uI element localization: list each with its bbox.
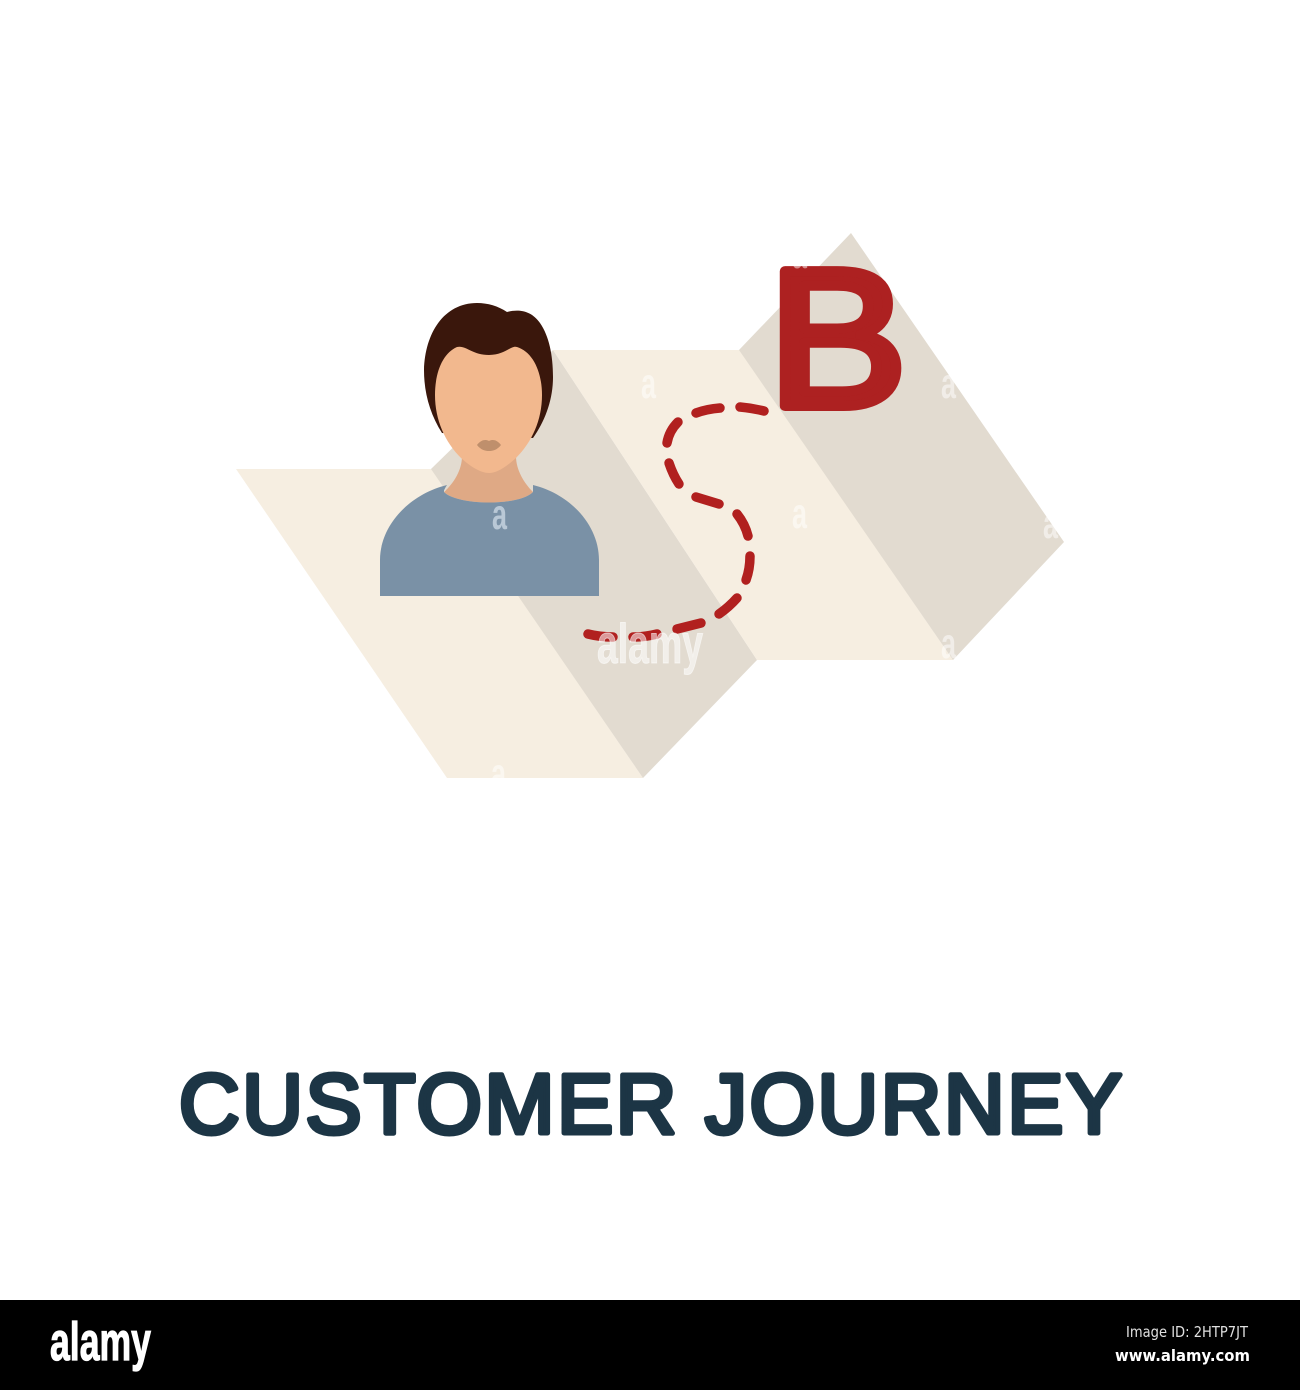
destination letter B: B [768,229,907,448]
lips [477,440,501,451]
alamy watermarks: a [492,491,508,539]
hair [424,303,553,438]
alamy watermarks: alamy [597,612,703,675]
face [435,347,542,473]
alamy watermarks: a [792,230,808,278]
alamy watermarks [491,230,1059,798]
alamy watermarks: a [491,750,507,798]
footer bar [0,1300,1300,1390]
website: www.alamy.com [1115,1346,1250,1365]
title: CUSTOMER JOURNEY [179,1057,1122,1151]
icon: folded map [236,233,1064,778]
dashed route line [588,407,764,637]
alamy watermarks: a [641,360,657,408]
alamy watermarks: a [941,620,957,668]
footer logo: alamy [50,1312,151,1372]
neck [444,456,533,502]
shirt [380,485,599,596]
alamy watermarks: a [1043,500,1059,548]
alamy watermarks: a [792,490,808,538]
alamy watermarks: a [941,360,957,408]
icon: customer portrait [380,303,599,596]
image id: Image ID: 2HTP7JT [1126,1323,1249,1341]
